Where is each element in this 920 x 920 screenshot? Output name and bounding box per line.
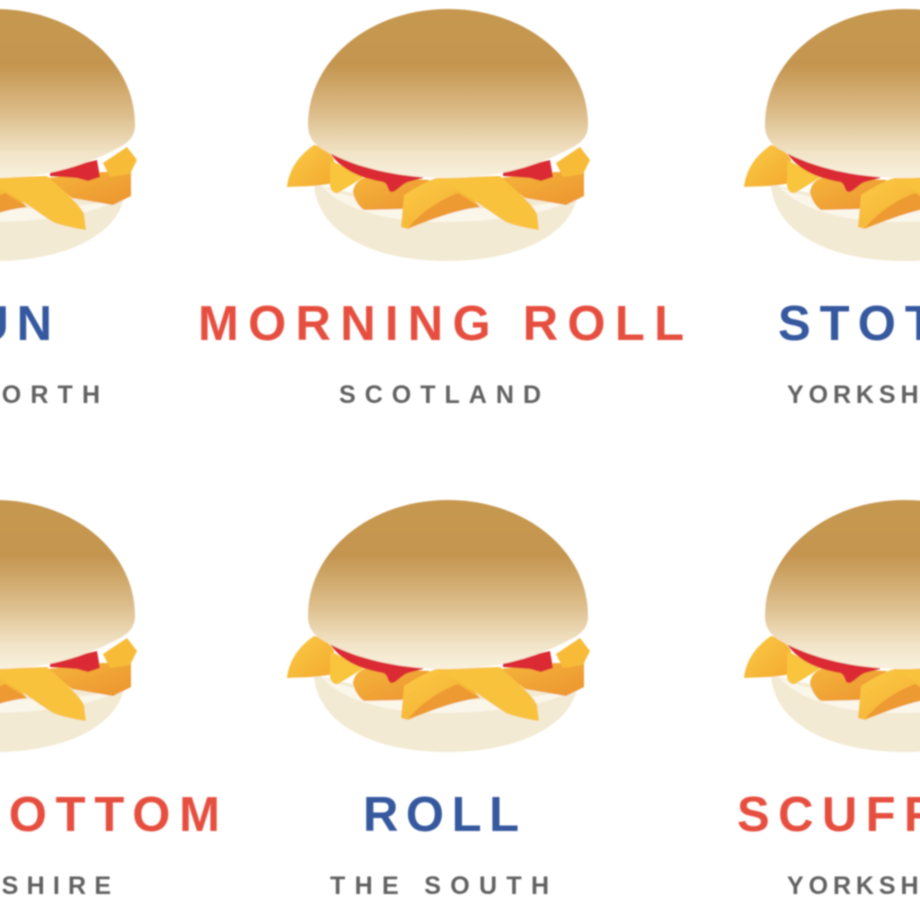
labels [0,297,920,900]
icon: burger bottom left [0,500,137,752]
label: morning roll, scotland [198,297,684,409]
label: roll, the south: ROLL [363,788,519,842]
icon: burger top centre [287,9,590,261]
label: oven bottom, lancashire [0,788,220,900]
icon: burger bottom centre [287,500,590,752]
label: morning roll, scotland: MORNING ROLL [198,297,684,351]
label: bun, the north [0,297,100,409]
icon: burger top right [744,9,920,261]
label: morning roll, scotland: SCOTLAND [339,381,541,409]
label: scuffler, yorkshire [737,788,920,900]
label: roll, the south: THE SOUTH [330,872,549,900]
icon: burger bottom right [744,500,920,752]
label: roll, the south [330,788,549,900]
label: stottie, yorkshire [778,297,920,409]
icon: burger top left [0,9,137,261]
